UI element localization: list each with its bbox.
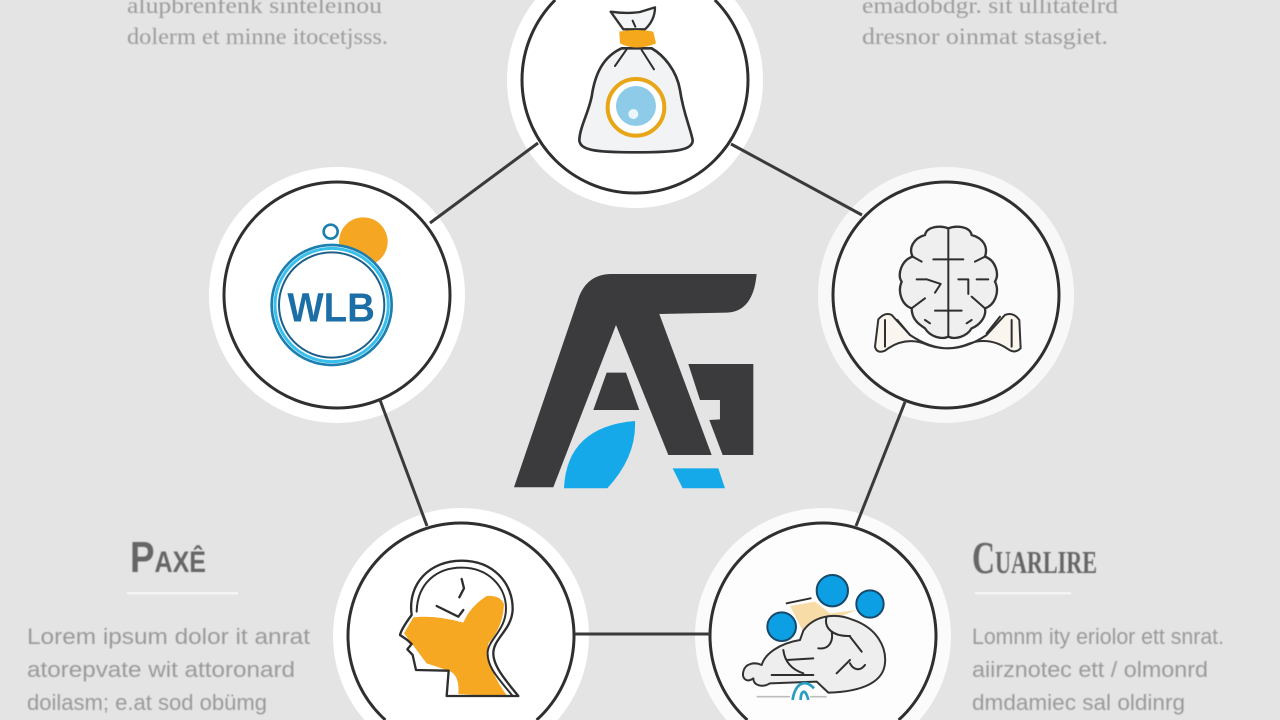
icon: WLB ring with sun (272, 217, 392, 365)
heading: Paxe: PAXÊ (130, 533, 206, 582)
logo: central AG mark (514, 274, 757, 488)
text block: bottom right: aiirznotec ett / olmonrd (972, 657, 1208, 682)
text block: bottom right (972, 624, 1224, 715)
icon: brain cluster with blue dots (743, 575, 885, 700)
panel: bottom right node brain cluster (695, 508, 951, 720)
text block: bottom right: Lomnm ity eriolor ett snrat. (972, 624, 1224, 649)
divider: right heading rule (975, 592, 1071, 594)
panel: left node WLB (209, 167, 465, 423)
pentagon connector lines (380, 143, 905, 634)
icon: brain held by hands (875, 227, 1021, 352)
icon: WLB ring with sun: WLB (287, 285, 375, 331)
text block: top right (862, 0, 1119, 49)
panel: top node money bag (507, 0, 763, 208)
text block: bottom left: doilasm; e.at sod obümg (27, 690, 267, 715)
panel: bottom left node head (333, 508, 589, 720)
panel: right node brain (818, 167, 1074, 423)
text block: top left (127, 0, 388, 49)
divider: left heading rule (127, 592, 238, 594)
text block: bottom right: dmdamiec sal oldinrg (972, 690, 1185, 715)
text block: bottom left: Lorem ipsum dolor it anrat (27, 624, 310, 649)
heading: Cuarlire: CUARLIRE (972, 532, 1097, 583)
text block: bottom left: atorepvate wit attoronard (27, 657, 295, 682)
text block: bottom left (27, 624, 310, 715)
text block: top right: dresnor oinmat stasgiet. (862, 24, 1108, 49)
icon: head profile with clock (400, 561, 518, 697)
icon: money bag with coin (579, 7, 693, 152)
text block: top left: dolerm et minne itocetjsss. (127, 24, 388, 49)
